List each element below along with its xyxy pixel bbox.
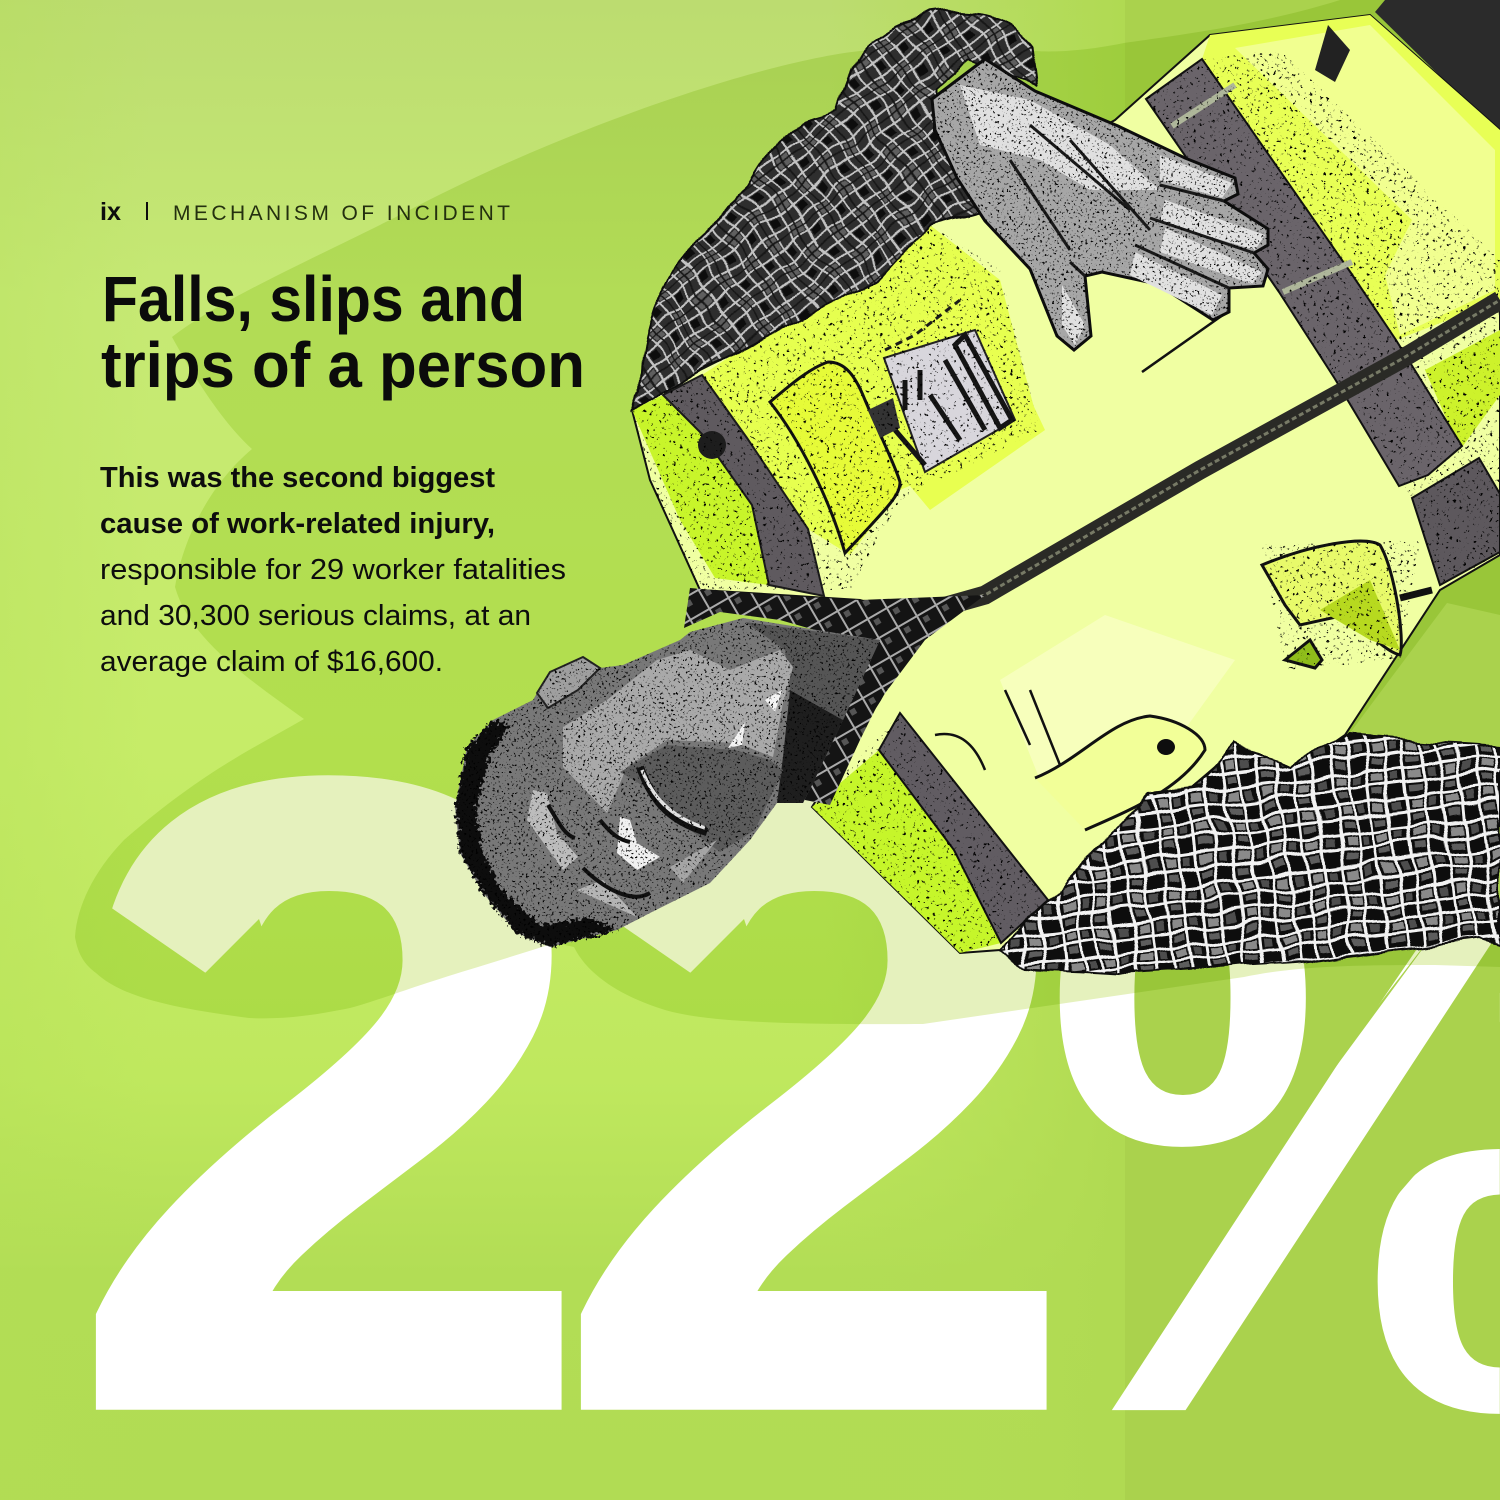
body text bbox=[100, 462, 566, 678]
bright vest panels bbox=[1202, 15, 1500, 340]
body text: average claim of $16,600. bbox=[100, 646, 443, 678]
worker illustration bbox=[455, 0, 1500, 975]
title: trips of a person bbox=[101, 329, 585, 401]
body text: responsible for 29 worker fatalities bbox=[100, 554, 566, 586]
vest speckle bbox=[632, 15, 1500, 955]
vest snap bbox=[698, 431, 726, 459]
upper sleeve bbox=[632, 12, 1035, 410]
title: Falls, slips and bbox=[102, 263, 525, 335]
pocket flap lower bbox=[1035, 716, 1205, 830]
pocket flap right bbox=[1262, 541, 1401, 655]
facial lines bbox=[640, 767, 707, 832]
text and worker artwork bbox=[100, 0, 1500, 976]
hand bbox=[930, 55, 1275, 355]
section label: ix bbox=[100, 198, 121, 226]
face highlights bbox=[563, 650, 793, 813]
reflective stripe lower bbox=[879, 713, 1048, 943]
lower sleeve bbox=[1000, 735, 1500, 975]
hair bbox=[455, 720, 617, 947]
upper-right dark shirt bbox=[1375, 0, 1500, 135]
front pocket flap upper bbox=[770, 362, 900, 553]
section label: MECHANISM OF INCIDENT bbox=[173, 202, 510, 225]
ear bbox=[537, 657, 600, 708]
section label bbox=[100, 198, 510, 226]
reflective stripe right piece bbox=[1412, 458, 1500, 585]
body text: This was the second biggest bbox=[100, 462, 495, 494]
hi-vis vest bbox=[632, 15, 1500, 955]
neck shadow bbox=[777, 690, 843, 803]
reflective stripe upper bbox=[1146, 59, 1462, 486]
body text: cause of work-related injury, bbox=[100, 508, 495, 540]
reflective stripe left bbox=[663, 375, 824, 596]
pale pocket bbox=[1000, 615, 1235, 830]
head bbox=[455, 615, 885, 950]
id pocket bbox=[885, 282, 1045, 510]
front zipper bbox=[925, 300, 1500, 612]
shirt collar bbox=[684, 588, 985, 805]
body text: and 30,300 serious claims, at an bbox=[100, 600, 531, 632]
big number: 22% bbox=[96, 775, 1500, 1414]
title bbox=[101, 263, 585, 401]
